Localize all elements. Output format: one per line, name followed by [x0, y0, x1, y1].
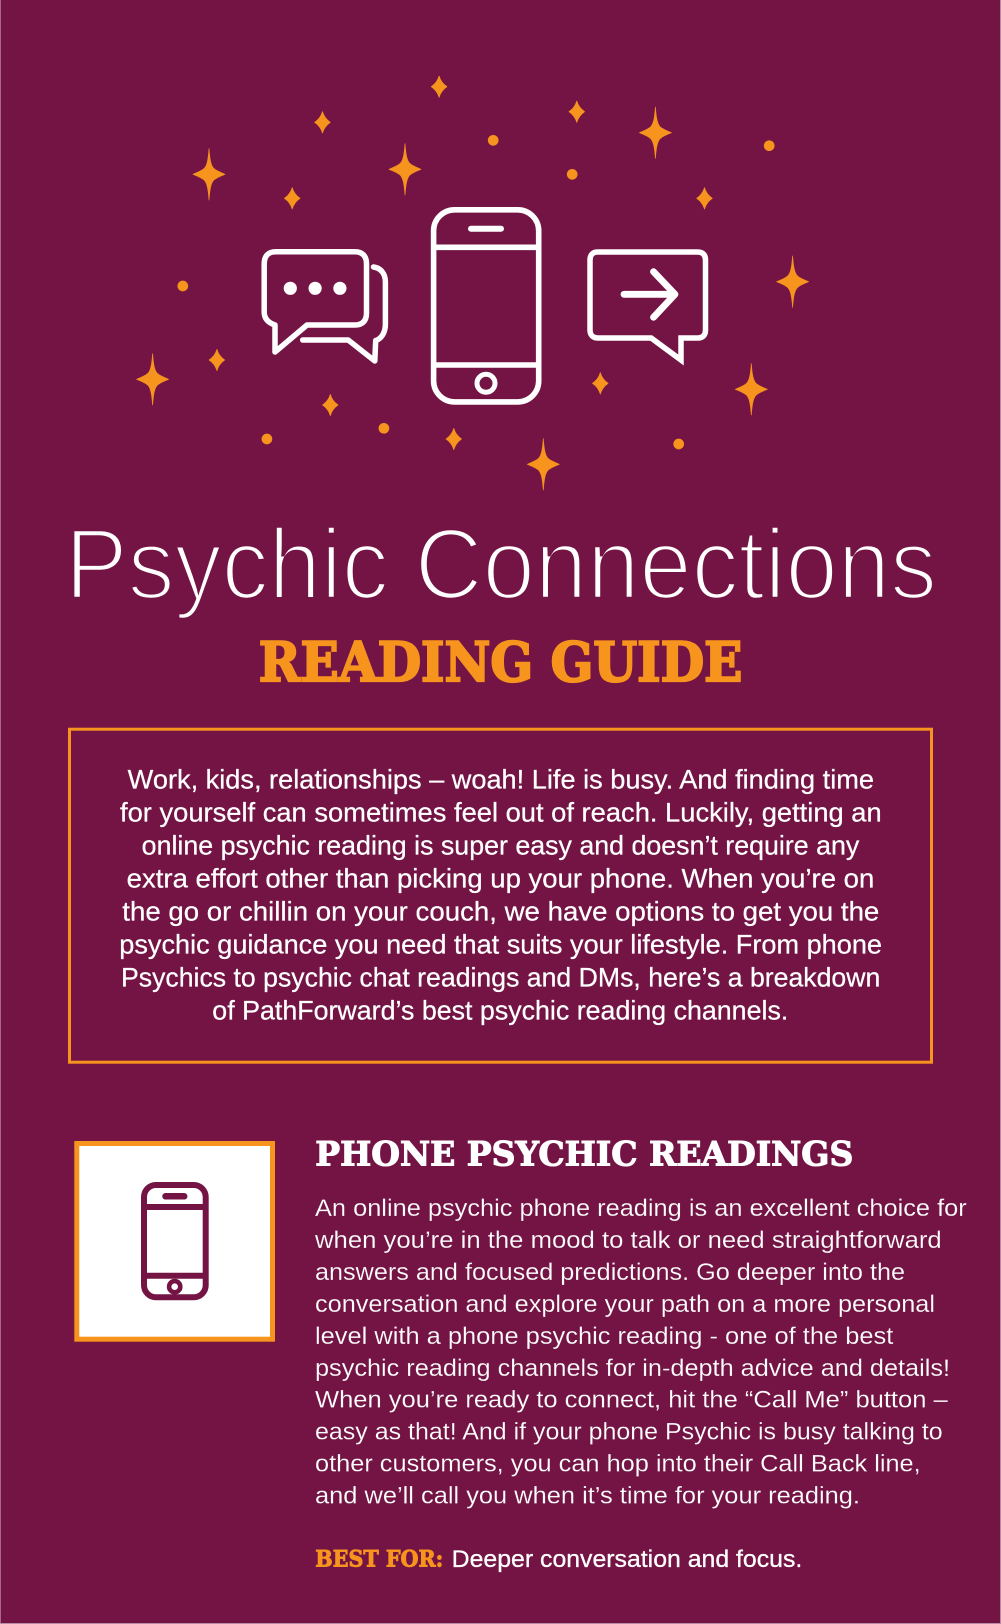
- icon: phone: [144, 1185, 206, 1297]
- title: Psychic Connections: Psychic Connections: [65, 508, 937, 620]
- intro text: online psychic reading is super easy and doesn’t require any: [142, 830, 860, 860]
- intro text: the go or chillin on your couch, we have options to get you the: [122, 896, 879, 926]
- text block: phone readings description: level with a phone psychic reading - one of the best: [315, 1323, 893, 1350]
- hero illustration: stars, chat bubbles and phone: [137, 76, 809, 490]
- icon: smartphone outline: [434, 210, 539, 402]
- text block: phone readings description: easy as that! And if your phone Psychic is busy talking to: [315, 1419, 943, 1446]
- subtitle: Reading Guide: READING GUIDE: [259, 630, 742, 694]
- intro text: for yourself can sometimes feel out of reach. Luckily, getting an: [120, 797, 882, 827]
- text block: phone readings description: psychic reading channels for in-depth advice and details!: [315, 1355, 950, 1382]
- intro text: Psychics to psychic chat readings and DMs, here’s a breakdown: [121, 962, 880, 992]
- text block: phone readings description: other customers, you can hop into their Call Back line,: [315, 1451, 921, 1478]
- panel: intro callout: [70, 729, 932, 1062]
- text block: phone readings description: When you’re ready to connect, hit the “Call Me” button –: [315, 1387, 948, 1414]
- intro text: psychic guidance you need that suits your lifestyle. From phone: [119, 929, 882, 959]
- icon: chat bubbles: [264, 252, 385, 361]
- icon: speech bubble with arrow: [590, 252, 706, 360]
- panel: phone icon tile: [77, 1144, 272, 1339]
- best for line: Deeper conversation and focus.: [452, 1546, 802, 1573]
- text block: phone readings description: [314, 1195, 967, 1510]
- text block: phone readings description: conversation and explore your path on a more personal: [315, 1291, 935, 1318]
- text block: phone readings description: answers and focused predictions. Go deeper into the: [315, 1259, 905, 1286]
- intro text: of PathForward’s best psychic reading channels.: [212, 995, 788, 1025]
- text block: phone readings description: An online psychic phone reading is an excellent choice for: [315, 1195, 967, 1222]
- sparkle stars and dots: [137, 76, 809, 490]
- intro text: extra effort other than picking up your phone. When you’re on: [127, 863, 874, 893]
- text block: phone readings description: and we’ll call you when it’s time for your reading.: [315, 1483, 860, 1510]
- intro text: Work, kids, relationships – woah! Life is busy. And finding time: [128, 764, 874, 794]
- heading: Phone Psychic Readings: PHONE PSYCHIC READINGS: [315, 1134, 853, 1174]
- intro text: [119, 764, 882, 1025]
- best for line: BEST FOR:: [315, 1546, 443, 1572]
- text block: phone readings description: when you’re in the mood to talk or need straightforward: [314, 1227, 942, 1254]
